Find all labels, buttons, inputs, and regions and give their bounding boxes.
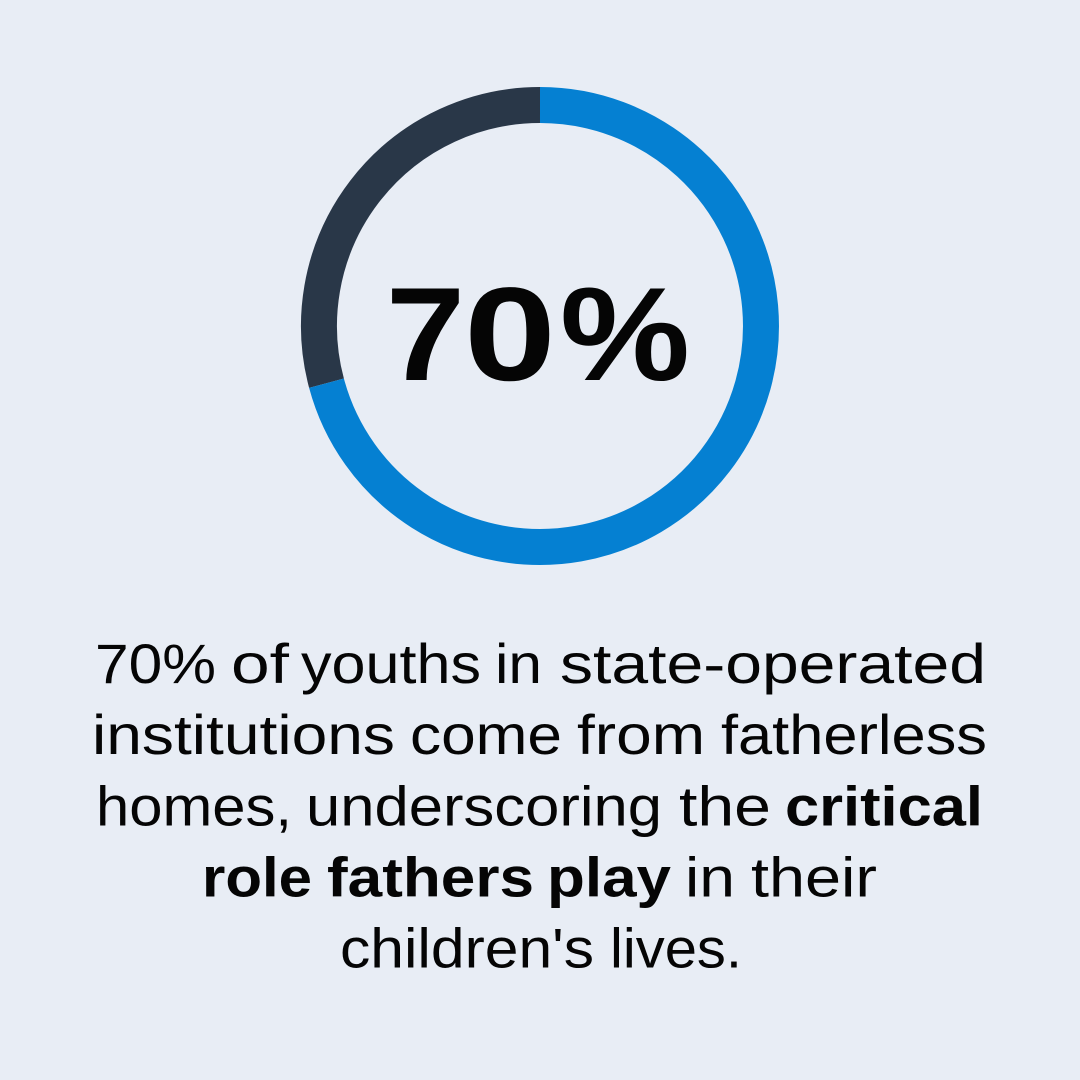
description text xyxy=(92,632,987,980)
description text: lives. xyxy=(610,916,742,980)
description text: in xyxy=(495,632,542,695)
70 percent arc xyxy=(326,105,761,547)
description text: fathers xyxy=(327,846,534,908)
description text: come xyxy=(410,703,562,766)
description text: role xyxy=(202,846,312,908)
description text: youths xyxy=(301,632,481,695)
description text: play xyxy=(547,846,671,908)
description text: in xyxy=(685,846,735,908)
description text: fatherless xyxy=(721,703,987,766)
big number: 7 xyxy=(386,261,465,409)
description text: of xyxy=(231,632,290,695)
description text: 70% xyxy=(95,632,216,695)
description text: institutions xyxy=(92,703,395,766)
big number xyxy=(386,261,690,409)
donut chart: 70 percent xyxy=(319,105,761,547)
description text: children's xyxy=(340,916,594,980)
description text: their xyxy=(751,846,877,908)
big number: % xyxy=(560,261,690,409)
description text: critical xyxy=(785,774,983,838)
big number: 0 xyxy=(464,261,556,409)
description text: homes, xyxy=(96,774,292,838)
description text: underscoring xyxy=(306,774,662,838)
description text: state-operated xyxy=(560,632,986,695)
remaining 30 percent arc xyxy=(319,105,540,383)
description text: from xyxy=(577,703,705,766)
description text: the xyxy=(679,774,771,838)
